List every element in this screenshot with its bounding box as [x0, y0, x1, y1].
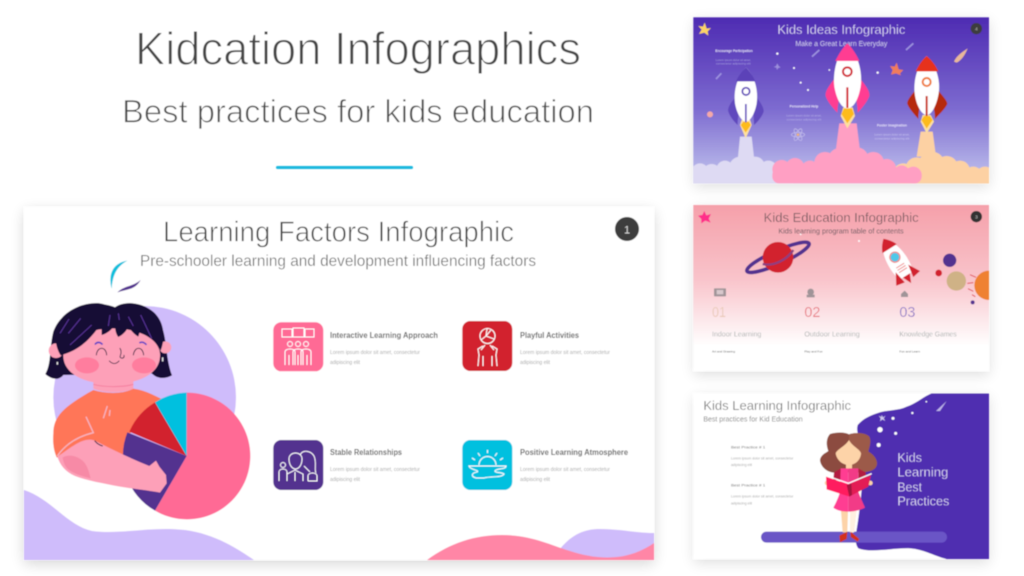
sleeve trim — [57, 406, 110, 456]
body text: adipiscing elit — [330, 477, 360, 483]
bottom right pink wave — [427, 535, 654, 560]
callout: foster imagination: Foster Imagination — [877, 124, 907, 128]
main title: Kidcation Infographics — [135, 22, 581, 74]
callout: encourage participation: Lorem ipsum dolor sit amet, — [716, 58, 751, 62]
body text: Lorem ipsum dolor sit amet, consectetur — [520, 467, 610, 473]
column: knowledge games: 03 — [899, 304, 915, 321]
column: outdoor learning: Outdoor Learning — [804, 331, 860, 338]
face and neck — [836, 440, 861, 465]
body text: adipiscing elit — [520, 360, 550, 366]
body text: adipiscing elit — [330, 360, 360, 366]
body text — [520, 350, 610, 366]
swooshes — [110, 261, 127, 289]
body text — [330, 350, 420, 366]
rocket — [872, 231, 923, 291]
icon: star — [698, 23, 711, 36]
accent divider line — [276, 166, 413, 169]
ears — [49, 343, 63, 358]
callout: foster imagination — [874, 124, 910, 140]
column: outdoor learning — [804, 289, 860, 353]
planet with ring — [744, 237, 812, 277]
body text: Lorem ipsum dolor sit amet, consectetur — [330, 350, 420, 356]
slide title text: Kids — [897, 451, 922, 465]
rocket centre — [826, 43, 869, 128]
shirt — [53, 389, 167, 458]
callout: foster imagination: consectetur adipiscing elit — [875, 136, 910, 140]
icon: family — [273, 440, 323, 490]
subheading: Kids learning program table of contents — [778, 229, 904, 236]
purple blob background — [856, 393, 989, 559]
slide heading: Learning Factors Infographic — [163, 217, 514, 249]
text block: best practice 1: Lorem ipsum dolor sit amet, consectetur — [731, 456, 794, 460]
illustration: girl holding pie chart — [45, 261, 250, 519]
clouds left — [693, 156, 776, 184]
subtitle: Best practices for kids education — [122, 94, 594, 130]
column: outdoor learning: 02 — [804, 304, 820, 321]
heading: Positive Learning Atmosphere — [520, 448, 629, 457]
flame trails — [738, 137, 754, 160]
rocket right — [907, 56, 947, 133]
open book — [826, 477, 849, 497]
body text: Lorem ipsum dolor sit amet, consectetur — [330, 467, 420, 473]
text block: best practice 2: Best Practice # 1 — [731, 483, 766, 488]
panel: kids learning slide — [693, 393, 989, 563]
heading: Stable Relationships — [330, 448, 403, 457]
subheading: Make a Great Learn Everyday — [795, 41, 888, 48]
slide title text — [897, 451, 949, 509]
text block: best practice 2: adipiscing elit — [731, 501, 752, 505]
text block: best practice 2 — [731, 483, 794, 505]
pie chart — [123, 393, 250, 519]
number badge — [971, 211, 982, 222]
body text — [520, 467, 610, 483]
decorative stars and planets — [707, 43, 968, 142]
dress — [833, 468, 848, 512]
column: indoor learning: Art and Drawing — [712, 349, 735, 353]
bottom right lavender wave — [560, 529, 654, 560]
column: knowledge games: Knowledge Games — [899, 331, 957, 338]
icon: sun over water — [462, 440, 512, 490]
lavender circle — [53, 306, 236, 489]
shoes — [839, 532, 859, 542]
icon: pink star — [698, 211, 711, 223]
text block: best practice 1: Best Practice # 1 — [731, 444, 766, 449]
column: indoor learning: Indoor Learning — [712, 331, 761, 338]
hands — [825, 481, 829, 485]
panel: kids ideas slide — [692, 17, 994, 187]
callout: personalized help: Personalized Help — [790, 105, 818, 109]
slide title text: Best — [897, 480, 922, 494]
bottom left lavender wave — [24, 490, 254, 560]
heading: Kids Ideas Infographic — [777, 23, 905, 37]
heading: Kids Learning Infographic — [703, 399, 851, 413]
callout: foster imagination: Lorem ipsum dolor sit amet, — [874, 133, 910, 137]
callout: personalized help: Lorem ipsum dolor sit amet, — [786, 114, 822, 118]
decorative planets — [800, 233, 989, 304]
back hair — [45, 303, 172, 379]
heading: Playful Activities — [520, 331, 580, 340]
callout: encourage participation: Encourage Participation — [715, 49, 753, 53]
stars — [877, 401, 947, 447]
item: interactive learning approach — [273, 322, 438, 371]
heading: Kids Education Infographic — [764, 211, 919, 225]
face — [63, 328, 160, 384]
callout: personalized help — [786, 105, 822, 121]
legs — [841, 511, 856, 532]
subheading: Best practices for Kid Education — [703, 417, 803, 424]
item: positive learning atmosphere — [462, 440, 629, 490]
text block: best practice 2: Lorem ipsum dolor sit amet, consectetur — [731, 495, 794, 499]
clouds centre — [772, 147, 922, 183]
callout: encourage participation: consectetur adipiscing elit — [716, 62, 751, 66]
hair fringe — [56, 303, 163, 355]
rocket left — [728, 67, 764, 138]
illustration: girl reading book — [820, 433, 877, 542]
slide subheading: Pre-schooler learning and development influencing factors — [140, 253, 536, 270]
text block: best practice 1: adipiscing elit — [731, 463, 752, 467]
column: indoor learning — [712, 288, 761, 353]
item: playful activities — [462, 321, 610, 371]
column: knowledge games — [899, 291, 957, 353]
body text: Lorem ipsum dolor sit amet, consectetur — [520, 350, 610, 356]
body text — [330, 467, 420, 483]
icon: people with speech bubbles — [273, 322, 323, 371]
neck — [93, 380, 133, 392]
hair strands — [60, 313, 152, 345]
panel: learning factors slide — [24, 207, 654, 564]
cheeks — [75, 357, 99, 373]
column: indoor learning: 01 — [712, 304, 726, 321]
column: knowledge games: Fun and Learn — [899, 349, 920, 353]
number badge: 4 — [975, 27, 978, 33]
sleeves — [833, 468, 867, 480]
panel: kids education slide — [693, 205, 989, 375]
text block: best practice 1 — [731, 444, 794, 467]
icon: volleyball and hands — [462, 321, 512, 371]
slide number badge: 1 — [624, 224, 630, 236]
hair — [820, 433, 877, 473]
callout: personalized help: consectetur adipiscing elit — [787, 117, 822, 121]
heading: Interactive Learning Approach — [330, 331, 438, 340]
slide title text: Practices — [897, 495, 949, 509]
eyes, brows, nose, mouth — [96, 348, 144, 363]
callout: encourage participation — [715, 49, 753, 66]
slide title text: Learning — [897, 466, 948, 480]
item: stable relationships — [273, 440, 420, 490]
column: outdoor learning: Play and Fun — [804, 349, 823, 353]
floor bar — [761, 532, 947, 543]
number badge: 3 — [975, 215, 978, 221]
slide number badge — [615, 217, 639, 241]
arm — [57, 440, 167, 493]
clouds right — [893, 152, 994, 185]
number badge — [971, 23, 982, 34]
body text: adipiscing elit — [520, 477, 550, 483]
